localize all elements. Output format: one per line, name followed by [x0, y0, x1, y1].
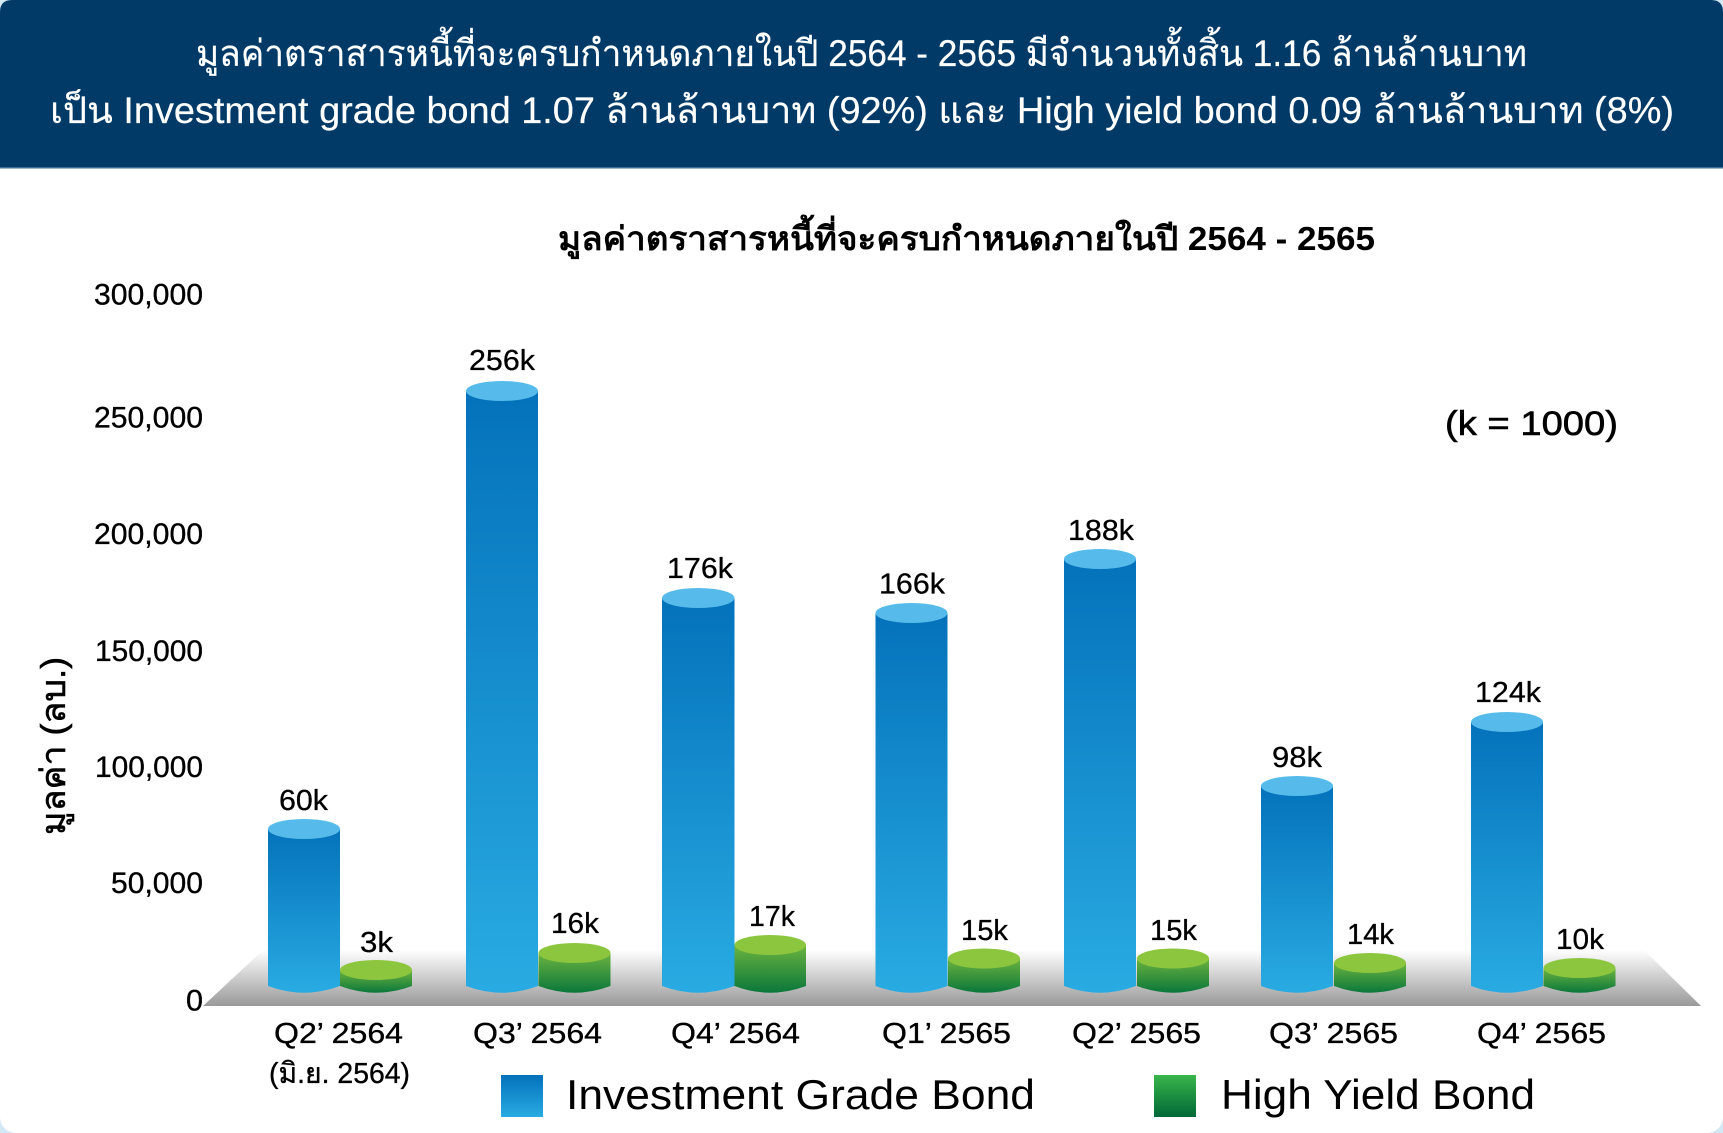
- value labels: 3k: [360, 927, 394, 959]
- y axis labels: 100,000: [95, 751, 203, 784]
- investment grade 124k: [1471, 712, 1543, 993]
- y axis labels: 0: [186, 984, 203, 1018]
- x axis labels: Q4’ 2564: [671, 1018, 800, 1050]
- y axis labels: 200,000: [94, 518, 203, 551]
- value labels: 10k: [1556, 924, 1605, 956]
- bars: Q3 2564: [466, 381, 610, 993]
- chart floor: [203, 950, 1701, 1006]
- legend swatch: high yield: [1154, 1075, 1196, 1117]
- x axis labels: Q3’ 2565: [1269, 1018, 1398, 1050]
- value labels: 15k: [961, 915, 1008, 947]
- value labels: 16k: [551, 908, 600, 940]
- high yield 10k: [1544, 958, 1616, 993]
- x axis labels: [269, 1018, 1606, 1090]
- investment grade 188k: [1064, 549, 1136, 993]
- y axis labels: [94, 278, 203, 1018]
- bars: Q4 2565: [1471, 712, 1616, 993]
- value labels: 60k: [279, 785, 329, 817]
- legend label: investment grade: Investment Grade Bond: [566, 1071, 1035, 1118]
- header line 2: เป็น Investment grade bond 1.07 ล้านล้านบาท (92%) และ High yield bond 0.09 ล้านล้านบาท (8%): [50, 87, 1674, 131]
- value labels: 256k: [469, 345, 536, 377]
- header line 1: มูลค่าตราสารหนี้ที่จะครบกำหนดภายในปี 2564 - 2565 มีจำนวนทั้งสิ้น 1.16 ล้านล้านบาท: [196, 26, 1527, 76]
- value labels: 176k: [667, 553, 734, 585]
- value labels: 15k: [1150, 915, 1197, 947]
- investment grade 98k: [1261, 776, 1333, 993]
- y axis title: มูลค่า (ลบ.): [35, 657, 74, 835]
- bars: Q1 2565: [876, 603, 1020, 993]
- investment grade 166k: [876, 603, 948, 993]
- high yield 16k: [538, 943, 610, 993]
- value labels: 188k: [1068, 515, 1135, 547]
- legend label: high yield: High Yield Bond: [1221, 1071, 1535, 1118]
- investment grade 256k: [466, 381, 538, 993]
- investment grade 176k: [662, 588, 734, 993]
- x axis labels: Q1’ 2565: [882, 1018, 1011, 1050]
- high yield 17k: [734, 935, 806, 993]
- legend: [501, 1071, 1535, 1118]
- high yield 3k: [340, 960, 412, 993]
- y axis labels: 50,000: [111, 867, 203, 900]
- investment grade 60k: [268, 819, 340, 993]
- value labels: 17k: [749, 901, 795, 933]
- bars: Q2 2564: [268, 819, 412, 993]
- y axis labels: 250,000: [94, 402, 203, 434]
- x axis labels: Q4’ 2565: [1477, 1018, 1606, 1050]
- unit note: (k = 1000): [1445, 405, 1618, 443]
- bars: Q4 2564: [662, 588, 806, 993]
- x axis labels: (มิ.ย. 2564): [269, 1058, 410, 1090]
- high yield 15k: [948, 948, 1020, 993]
- header banner: [0, 0, 1723, 168]
- x axis labels: Q2’ 2564: [274, 1018, 403, 1050]
- value labels: 124k: [1475, 677, 1542, 709]
- x axis labels: Q3’ 2564: [473, 1018, 602, 1050]
- high yield 14k: [1334, 953, 1406, 993]
- bars: Q3 2565: [1261, 776, 1406, 993]
- value labels: 98k: [1272, 742, 1323, 774]
- legend swatch: investment grade: [501, 1075, 543, 1117]
- bars: Q2 2565: [1064, 549, 1209, 993]
- x axis labels: Q2’ 2565: [1072, 1018, 1201, 1050]
- chart title: มูลค่าตราสารหนี้ที่จะครบกำหนดภายในปี 2564 - 2565: [558, 214, 1375, 260]
- y axis labels: 150,000: [95, 635, 203, 668]
- high yield 15k: [1137, 948, 1209, 993]
- value labels: 14k: [1347, 919, 1394, 951]
- value labels: [279, 345, 1605, 959]
- y axis labels: 300,000: [94, 278, 203, 312]
- value labels: 166k: [879, 568, 946, 600]
